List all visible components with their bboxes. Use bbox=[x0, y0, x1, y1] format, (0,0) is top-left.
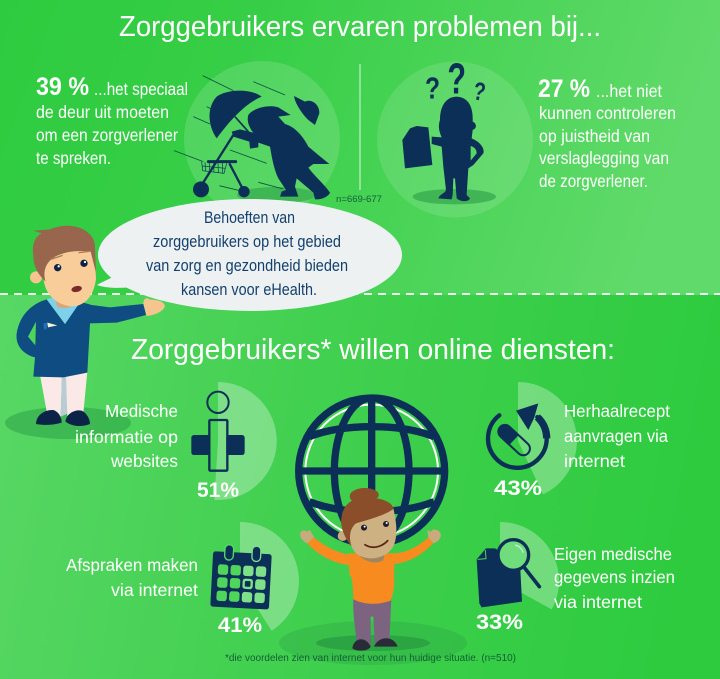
woman character bbox=[300, 488, 441, 651]
icon: confused person with document: ? bbox=[447, 54, 466, 103]
text: eigen medische bbox=[554, 544, 675, 612]
hair bbox=[33, 226, 96, 282]
ear bbox=[30, 271, 42, 283]
text block: 27 percent: op juistheid van bbox=[539, 126, 650, 146]
text: medische informatie: websites bbox=[110, 451, 178, 471]
footnote: *die voordelen zien van internet voor hun huidige situatie. (n=510) bbox=[225, 653, 516, 664]
text: herhaalrecept: Herhaalrecept bbox=[564, 401, 670, 421]
circle: question bbox=[377, 62, 533, 218]
smile bbox=[365, 541, 388, 547]
text block: 39 percent: ...het speciaal bbox=[94, 79, 188, 99]
wedge: 43 percent bbox=[518, 382, 577, 494]
icon: confused person with document bbox=[402, 54, 496, 204]
wedge: 41 percent bbox=[240, 522, 299, 631]
icon: old person in storm bbox=[174, 76, 330, 199]
neck bbox=[355, 547, 387, 562]
doctor shadow bbox=[5, 407, 131, 439]
ground shadows bbox=[279, 621, 467, 665]
hands bbox=[300, 530, 314, 543]
text: afspraken: Afspraken maken bbox=[66, 555, 198, 575]
shoes bbox=[352, 639, 371, 651]
text block: 27 percent: kunnen controleren bbox=[539, 103, 676, 123]
hand bbox=[143, 298, 165, 316]
text: eigen medische: gegevens inzien bbox=[554, 567, 675, 587]
text: eigen medische: Eigen medische bbox=[554, 544, 672, 564]
text: afspraken: via internet bbox=[111, 580, 198, 600]
umbrella bbox=[210, 91, 262, 138]
title top: Zorggebruikers ervaren problemen bij... bbox=[119, 11, 601, 43]
wedge: 33 percent bbox=[500, 522, 559, 609]
speech bubble: van zorg en gezondheid bieden bbox=[146, 256, 348, 275]
icon: medical information bbox=[191, 392, 245, 471]
icon: calendar bbox=[210, 544, 272, 610]
icon: confused person with document: ? bbox=[425, 70, 440, 105]
trousers bbox=[40, 375, 62, 417]
background top bbox=[0, 0, 720, 295]
text block: 27 percent: de zorgverlener. bbox=[539, 171, 648, 191]
text block: 39 percent: om een zorgverlener bbox=[36, 125, 178, 145]
text block: 27 percent: verslaglegging van bbox=[539, 148, 669, 168]
doctor character bbox=[16, 226, 165, 426]
shirt collar bbox=[47, 297, 80, 324]
title bottom: Zorggebruikers* willen online diensten: bbox=[131, 334, 615, 366]
torso bbox=[348, 553, 395, 604]
text block: 27 percent: 27 % bbox=[538, 75, 590, 103]
text: eigen medische: via internet bbox=[554, 592, 642, 612]
text: herhaalrecept: aanvragen via bbox=[564, 426, 668, 446]
sample size label: n=669-677 bbox=[336, 194, 382, 204]
speech bubble: kansen voor eHealth. bbox=[181, 280, 317, 299]
circle: storm bbox=[184, 61, 340, 217]
text block: 39 percent: te spreken. bbox=[36, 148, 111, 168]
speech bubble: zorggebruikers op het gebied bbox=[153, 232, 341, 251]
hat bbox=[294, 96, 319, 125]
background bottom bbox=[0, 295, 720, 679]
face bbox=[43, 243, 96, 306]
ear bbox=[338, 531, 348, 541]
icon: confused person with document: ? bbox=[471, 77, 488, 107]
icon: globe bbox=[299, 398, 445, 544]
text: medische informatie: Medische bbox=[105, 401, 178, 421]
percent 33: 33% bbox=[476, 611, 523, 634]
icon: repeat prescription bbox=[488, 403, 547, 468]
text: medische informatie bbox=[75, 401, 178, 471]
divider bbox=[0, 293, 720, 295]
person bbox=[232, 106, 330, 199]
icon: document with magnifier bbox=[477, 540, 539, 607]
speech bubble bbox=[97, 199, 402, 311]
text block: 27 percent: ...het niet bbox=[596, 81, 662, 101]
percent 43: 43% bbox=[494, 477, 542, 500]
eyes bbox=[361, 525, 367, 531]
percent 51: 51% bbox=[197, 479, 239, 502]
shoes bbox=[36, 410, 62, 425]
wedge: 51 percent bbox=[214, 382, 277, 500]
text: afspraken bbox=[66, 555, 198, 600]
hair bbox=[341, 488, 394, 547]
mouth bbox=[71, 285, 83, 293]
text: herhaalrecept: internet bbox=[564, 451, 625, 471]
vertical divider bbox=[359, 64, 361, 190]
trousers bbox=[353, 598, 391, 647]
text: herhaalrecept bbox=[564, 401, 670, 471]
text block: 39 percent bbox=[36, 73, 188, 168]
speech bubble: Behoeften van bbox=[204, 208, 295, 227]
eyes bbox=[54, 264, 61, 271]
walker bbox=[202, 135, 243, 190]
jacket bbox=[16, 299, 146, 377]
face bbox=[347, 505, 396, 558]
arms bbox=[307, 537, 433, 577]
percent 41: 41% bbox=[218, 614, 262, 637]
wind lines bbox=[174, 76, 285, 191]
text: medische informatie: informatie op bbox=[75, 427, 178, 447]
text block: 39 percent: 39 % bbox=[36, 73, 89, 101]
ground shadow: storm bbox=[237, 187, 317, 203]
text block: 27 percent bbox=[538, 75, 676, 191]
text block: 39 percent: de deur uit moeten bbox=[36, 102, 169, 122]
